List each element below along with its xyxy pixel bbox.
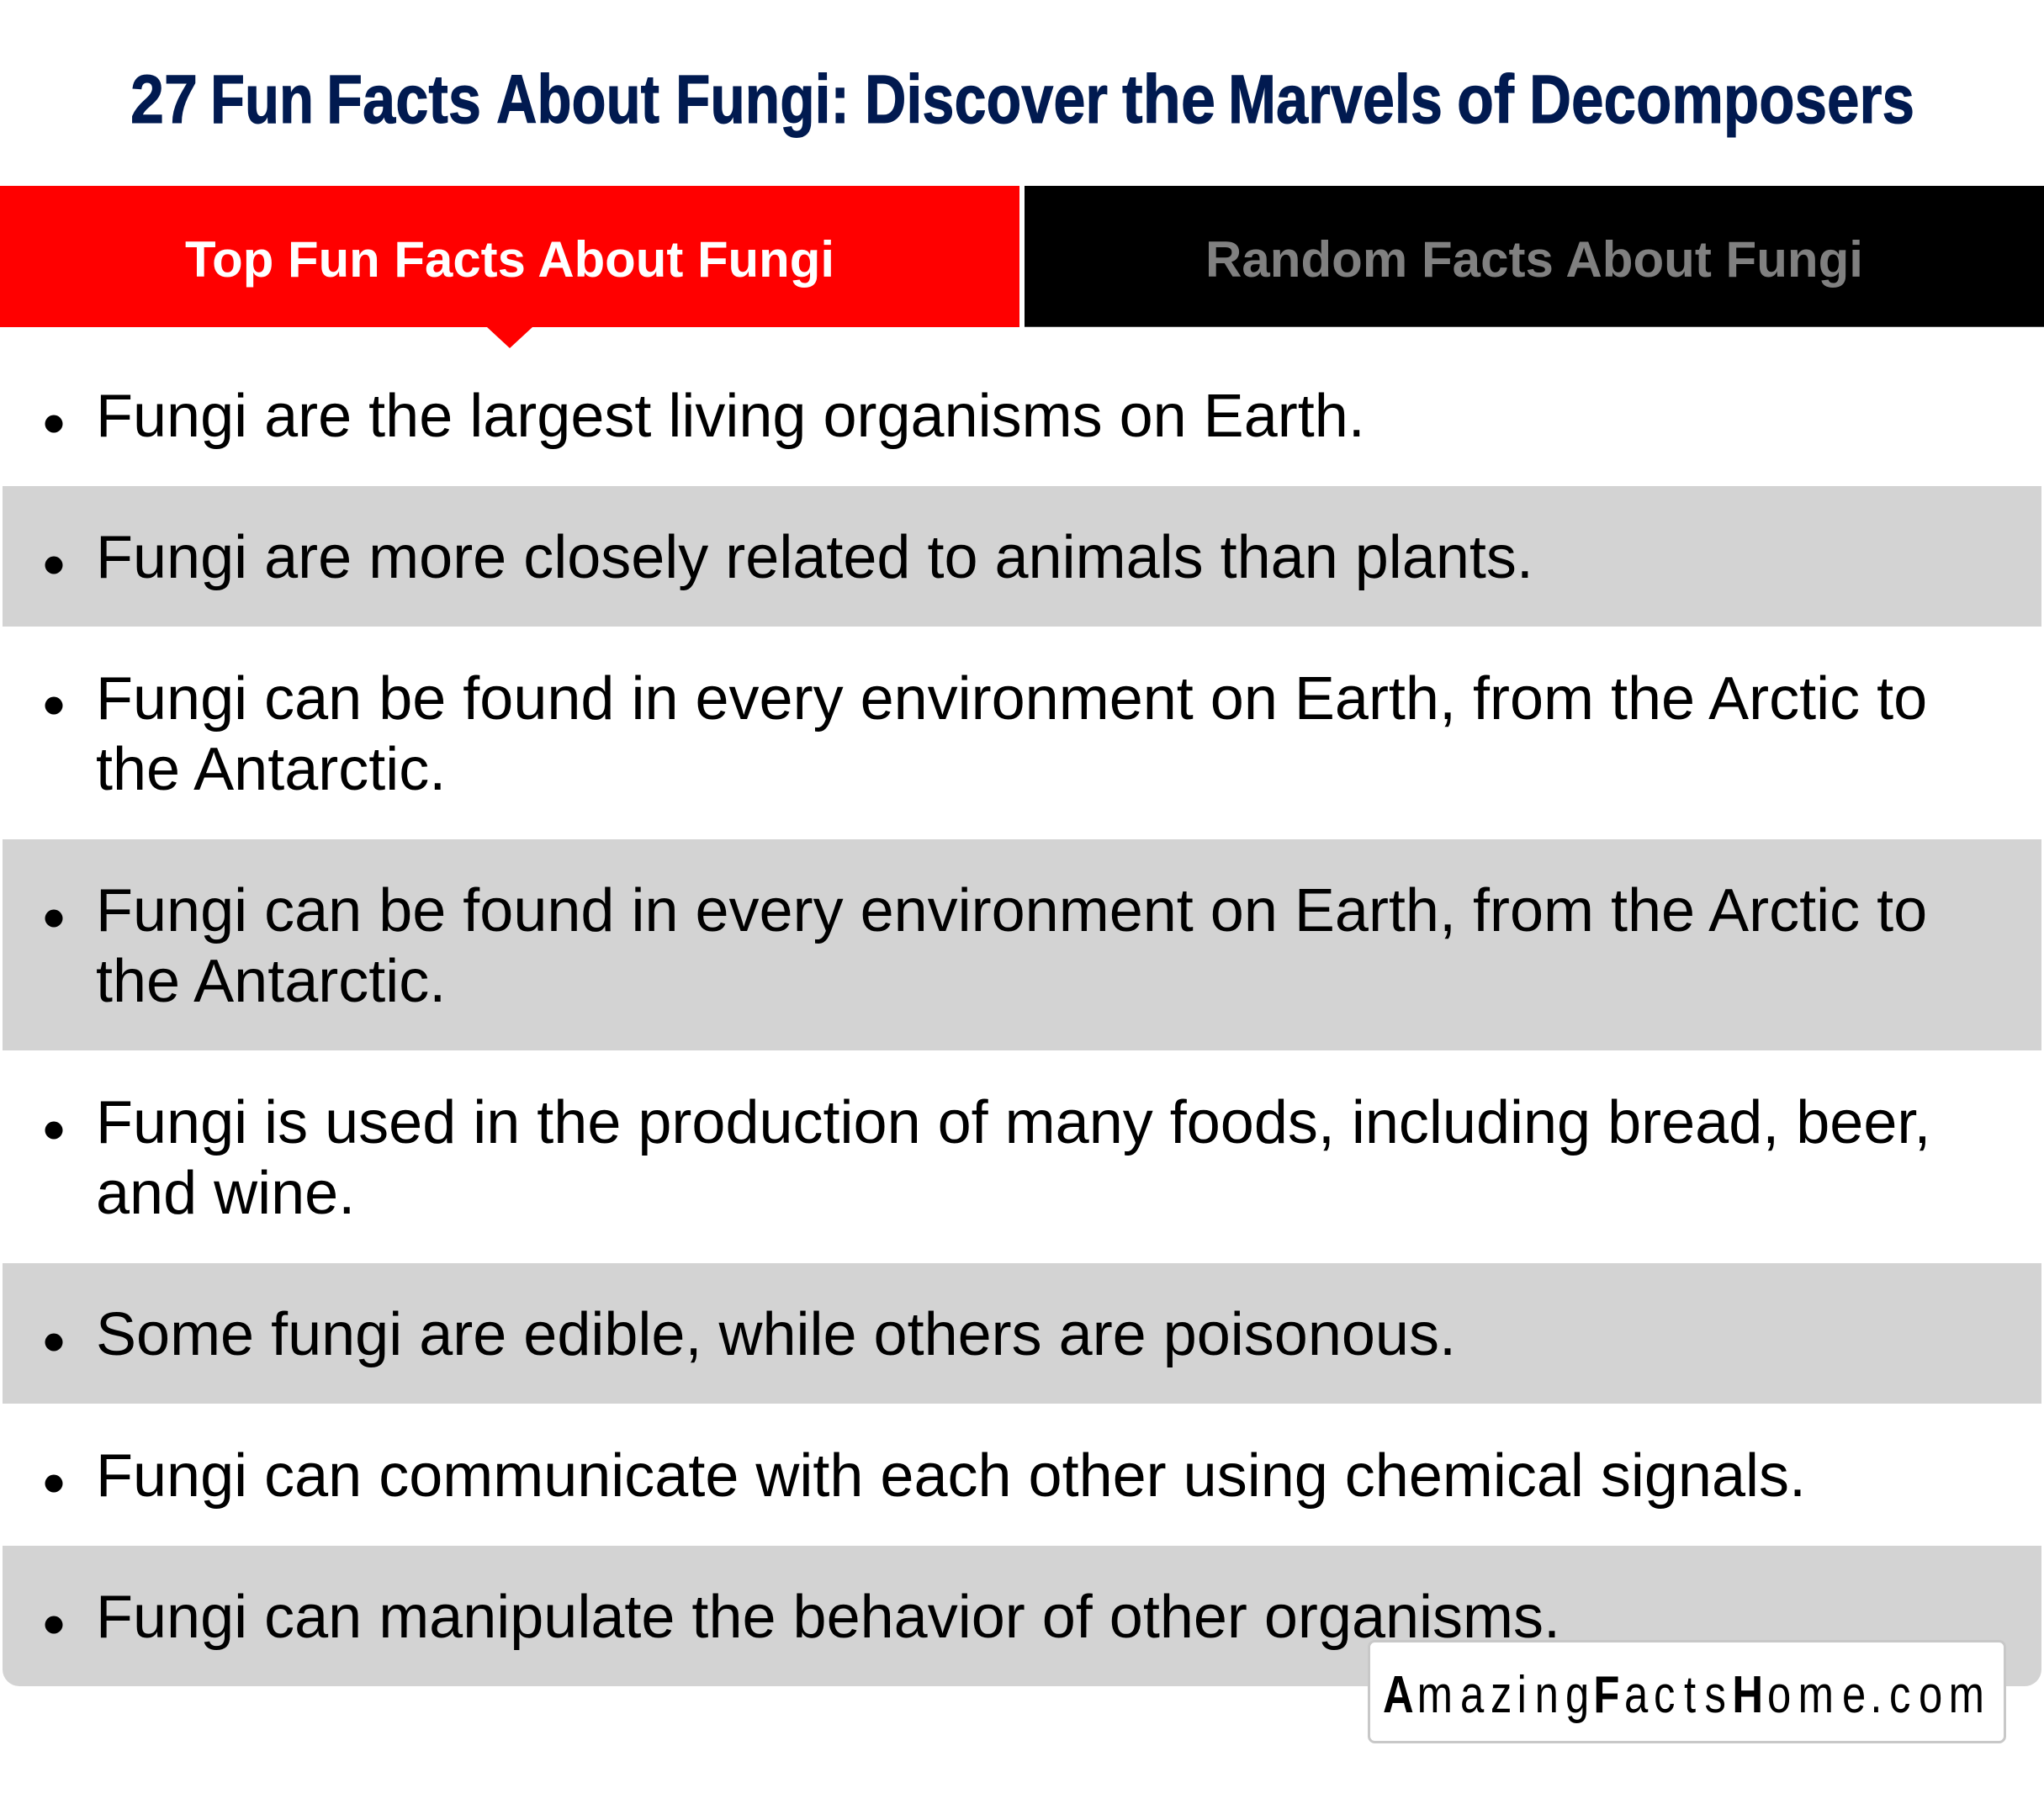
tab pointer — [487, 327, 532, 348]
fact 8 — [3, 1546, 2041, 1686]
fact 3 — [45, 665, 1927, 803]
tab: top fun facts (active) — [0, 186, 1019, 348]
fact 4: Fungi can be found in every environment on Earth, from the Arctic to — [96, 877, 1927, 944]
title: Facts — [326, 61, 481, 138]
title: Decomposers — [1529, 61, 1914, 138]
watermark badge — [1369, 1642, 2005, 1743]
title: the — [1122, 61, 1215, 138]
fact 1: Fungi are the largest living organisms on Earth. — [96, 383, 1365, 450]
tab: random facts (inactive) — [1025, 186, 2044, 327]
fact 5: Fungi is used in the production of many foods, including bread, beer, — [96, 1089, 1930, 1156]
title: Discover — [865, 61, 1108, 138]
tab: random facts (inactive): Random Facts About Fungi — [1205, 231, 1863, 288]
fact 3: Fungi can be found in every environment on Earth, from the Arctic to — [96, 665, 1927, 733]
title: Fun — [210, 61, 314, 138]
fact 6: Some fungi are edible, while others are poisonous. — [96, 1301, 1456, 1368]
watermark badge: AmazingFactsHome.com — [1383, 1666, 1984, 1724]
title: 27 — [130, 61, 198, 138]
fact 2: Fungi are more closely related to animals than plants. — [96, 524, 1533, 591]
fact 3: the Antarctic. — [96, 736, 446, 803]
fact 7: Fungi can communicate with each other using chemical signals. — [96, 1442, 1806, 1510]
title: Marvels — [1228, 61, 1443, 138]
fact 2 — [3, 486, 2041, 627]
title: of — [1457, 61, 1515, 138]
fact 5: and wine. — [96, 1160, 355, 1227]
fact 4 — [3, 839, 2041, 1050]
fact 8: Fungi can manipulate the behavior of other organisms. — [96, 1584, 1560, 1651]
title — [130, 61, 1914, 138]
fact 6 — [3, 1263, 2041, 1404]
tab: top fun facts (active): Top Fun Facts About Fungi — [185, 231, 834, 288]
title: About — [496, 61, 659, 138]
title: Fungi: — [675, 61, 850, 138]
fact 4: the Antarctic. — [96, 948, 446, 1015]
fact 5 — [45, 1089, 1930, 1227]
